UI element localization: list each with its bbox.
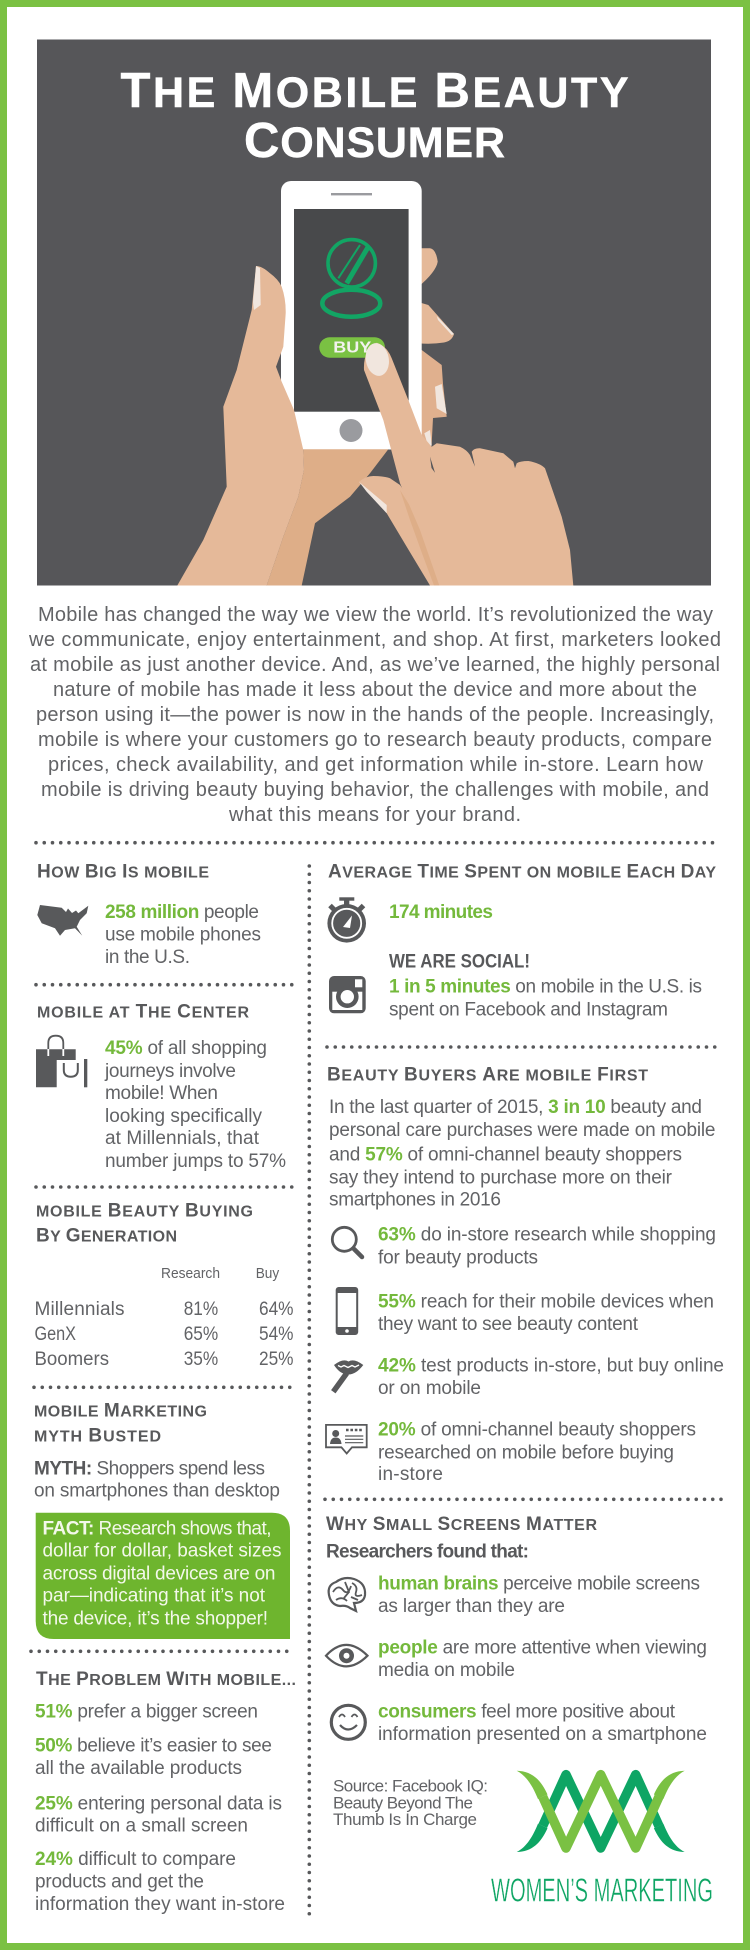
subheading: Researchers found that: — [326, 1542, 529, 1563]
table: GenX — [34, 1324, 76, 1345]
heading: AVERAGE TIME SPENT ON MOBILE EACH DAY — [328, 861, 716, 882]
table: Millennials — [34, 1299, 124, 1320]
stat text: journeys involve — [104, 1061, 236, 1082]
icon: left hand — [177, 266, 388, 586]
stat: human brains — [378, 1573, 700, 1617]
stat: 20%: researched on mobile before buying — [378, 1442, 674, 1463]
intro paragraph: person using it—the power is now in the hands of the people. Increasingly, — [36, 704, 714, 726]
intro paragraph: nature of mobile has made it less about the device and more about the — [53, 679, 697, 701]
icon: instagram — [329, 976, 366, 1013]
stat: 42%: or on mobile — [378, 1378, 481, 1399]
stat: human brains: as larger than they are — [378, 1596, 565, 1617]
heading — [34, 1401, 207, 1447]
stat: 50%: 50% believe it’s easier to see — [35, 1736, 272, 1757]
callout: fact: the device, it’s the shopper! — [42, 1608, 268, 1629]
stat text: at Millennials, that — [105, 1128, 260, 1149]
icon: smiley — [331, 1705, 365, 1739]
myth text: MYTH: Shoppers spend less — [34, 1458, 265, 1479]
stat: 174 minutes: 174 minutes — [389, 902, 493, 923]
callout: fact — [36, 1513, 290, 1639]
stat: 24%: information they want in-store — [35, 1894, 285, 1915]
icon: review card — [326, 1425, 367, 1454]
stat: 55%: they want to see beauty content — [378, 1314, 639, 1335]
stat: 55% — [378, 1291, 714, 1335]
stat: 20%: 20% of omni-channel beauty shoppers — [378, 1420, 696, 1441]
icon: compact mirror — [322, 240, 380, 317]
intro paragraph: mobile is driving beauty buying behavior, the challenges with mobile, and — [41, 779, 709, 801]
table: 64% — [259, 1299, 294, 1320]
stat: 42% — [378, 1356, 724, 1399]
intro paragraph: mobile is where your customers go to research beauty products, compare — [38, 729, 712, 751]
intro paragraph: we communicate, enjoy entertainment, and shop. At first, marketers looked — [28, 629, 721, 651]
title: THE MOBILE BEAUTY — [120, 64, 628, 118]
panel: average time spent — [327, 861, 716, 1021]
myth text — [34, 1458, 280, 1502]
table: 81% — [184, 1299, 218, 1320]
heading: MOBILE AT THE CENTER — [37, 1002, 249, 1023]
icon: US map — [37, 905, 88, 936]
stat text — [104, 1038, 286, 1172]
stat: people: people are more attentive when viewing — [378, 1637, 707, 1658]
stat: 55%: 55% reach for their mobile devices when — [378, 1291, 714, 1312]
stat: 63%: for beauty products — [378, 1247, 538, 1268]
paragraph: say they intend to purchase more on their — [329, 1167, 673, 1188]
table: Research — [161, 1265, 220, 1282]
table: 25% — [259, 1349, 294, 1370]
panel: hero illustration — [37, 40, 711, 586]
icon: brain — [329, 1578, 365, 1611]
stat text: 258 million people — [105, 902, 259, 923]
icon: eye — [326, 1645, 368, 1666]
stat: consumers: information presented on a smartphone — [378, 1724, 707, 1745]
panel: the problem with mobile — [35, 1669, 296, 1915]
stat: 24% — [35, 1849, 285, 1915]
stat: people: media on mobile — [378, 1660, 515, 1681]
stat text: mobile! When — [105, 1083, 218, 1104]
stat: 51%: 51% prefer a bigger screen — [35, 1702, 258, 1723]
panel: beauty buyers are mobile first — [326, 1065, 724, 1485]
title: CONSUMER — [244, 114, 505, 168]
heading: MYTH BUSTED — [34, 1426, 161, 1447]
icon: fingers behind phone — [418, 248, 454, 460]
panel: mobile at the center — [36, 1002, 286, 1172]
icon: stopwatch — [327, 897, 366, 943]
table: Boomers — [34, 1349, 109, 1370]
callout: fact: across digital devices are on — [42, 1563, 276, 1584]
stat: 1 in 5 minutes: spent on Facebook and Instagram — [389, 1000, 668, 1021]
panel: how big is mobile — [37, 861, 261, 968]
source note: Source: Facebook IQ: — [333, 1777, 488, 1796]
stat: 24%: products and get the — [35, 1871, 204, 1892]
stat: 1 in 5 minutes: 1 in 5 minutes on mobile in the U.S. is — [389, 977, 702, 998]
stat: 25%: difficult on a small screen — [35, 1816, 248, 1837]
buy button: BUY — [333, 340, 372, 357]
panel: why small screens matter — [326, 1514, 707, 1745]
intro paragraph: prices, check availability, and get information while in-store. Learn how — [48, 754, 704, 776]
icon: right hand — [359, 341, 573, 586]
source note: Thumb Is In Charge — [333, 1810, 477, 1829]
stat: human brains: human brains perceive mobile screens — [378, 1573, 700, 1594]
paragraph — [329, 1097, 716, 1211]
heading — [36, 1201, 253, 1247]
callout: fact: FACT: Research shows that, — [42, 1518, 272, 1539]
paragraph: personal care purchases were made on mobile — [329, 1120, 716, 1141]
source note: Beauty Beyond The — [333, 1793, 473, 1812]
heading: BY GENERATION — [36, 1226, 177, 1247]
icon: shopping bags — [36, 1036, 87, 1087]
intro paragraph — [28, 604, 721, 826]
heading: MOBILE MARKETING — [34, 1401, 207, 1422]
logo mark — [517, 1771, 685, 1852]
panel: buying by generation — [34, 1201, 294, 1370]
stat: 50%: all the available products — [35, 1758, 242, 1779]
callout: fact: dollar for dollar, basket sizes — [42, 1541, 282, 1562]
paragraph: In the last quarter of 2015, 3 in 10 beauty and — [329, 1097, 702, 1118]
stat text: use mobile phones — [105, 925, 261, 946]
heading: WHY SMALL SCREENS MATTER — [326, 1514, 597, 1535]
stat: consumers — [378, 1701, 707, 1745]
table — [34, 1265, 294, 1370]
stat: consumers: consumers feel more positive about — [378, 1701, 676, 1722]
title — [120, 64, 628, 168]
stat: 42%: 42% test products in-store, but buy online — [378, 1356, 724, 1377]
intro paragraph: what this means for your brand. — [228, 804, 521, 826]
stat: 50% — [35, 1736, 272, 1779]
stat: 1 in 5 minutes — [389, 977, 702, 1021]
subheading: we are social: WE ARE SOCIAL! — [389, 952, 530, 973]
stat text: in the U.S. — [105, 947, 190, 968]
stat: 20%: in-store — [378, 1464, 443, 1485]
phone — [281, 181, 422, 450]
table: 65% — [184, 1324, 218, 1345]
stat text: looking specifically — [105, 1106, 262, 1127]
myth text: on smartphones than desktop — [34, 1481, 280, 1502]
panel: myth busted — [34, 1401, 290, 1639]
intro paragraph: Mobile has changed the way we view the world. It’s revolutionized the way — [38, 604, 713, 626]
icon: lips and lipstick — [333, 1360, 363, 1392]
callout: fact: par—indicating that it’s not — [42, 1586, 266, 1607]
icon: magnifier — [332, 1227, 362, 1257]
table: Buy — [256, 1265, 280, 1282]
heading: THE PROBLEM WITH MOBILE... — [36, 1669, 296, 1690]
heading: HOW BIG IS MOBILE — [37, 861, 209, 882]
stat: 24%: 24% difficult to compare — [35, 1849, 236, 1870]
stat: 63%: 63% do in-store research while shopping — [378, 1225, 716, 1246]
buy button — [319, 337, 385, 358]
stat: people — [378, 1637, 707, 1681]
source note — [333, 1777, 488, 1829]
stat: 25%: 25% entering personal data is — [35, 1793, 282, 1814]
stat: 20% — [378, 1420, 696, 1485]
stat text — [105, 902, 261, 968]
heading: BEAUTY BUYERS ARE MOBILE FIRST — [327, 1065, 648, 1086]
heading: MOBILE BEAUTY BUYING — [36, 1201, 253, 1222]
stat text: number jumps to 57% — [105, 1151, 286, 1172]
stat: 63% — [378, 1225, 716, 1268]
paragraph: and 57% of omni-channel beauty shoppers — [329, 1145, 682, 1166]
paragraph: smartphones in 2016 — [329, 1190, 501, 1211]
icon: smartphone — [336, 1287, 358, 1335]
stat: 25% — [35, 1793, 282, 1837]
stat text: 45% of all shopping — [105, 1038, 267, 1059]
logo: women's marketing — [491, 1771, 713, 1909]
table: 54% — [259, 1324, 294, 1345]
table: 35% — [184, 1349, 218, 1370]
intro paragraph: at mobile as just another device. And, as we’ve learned, the highly personal — [30, 654, 720, 676]
